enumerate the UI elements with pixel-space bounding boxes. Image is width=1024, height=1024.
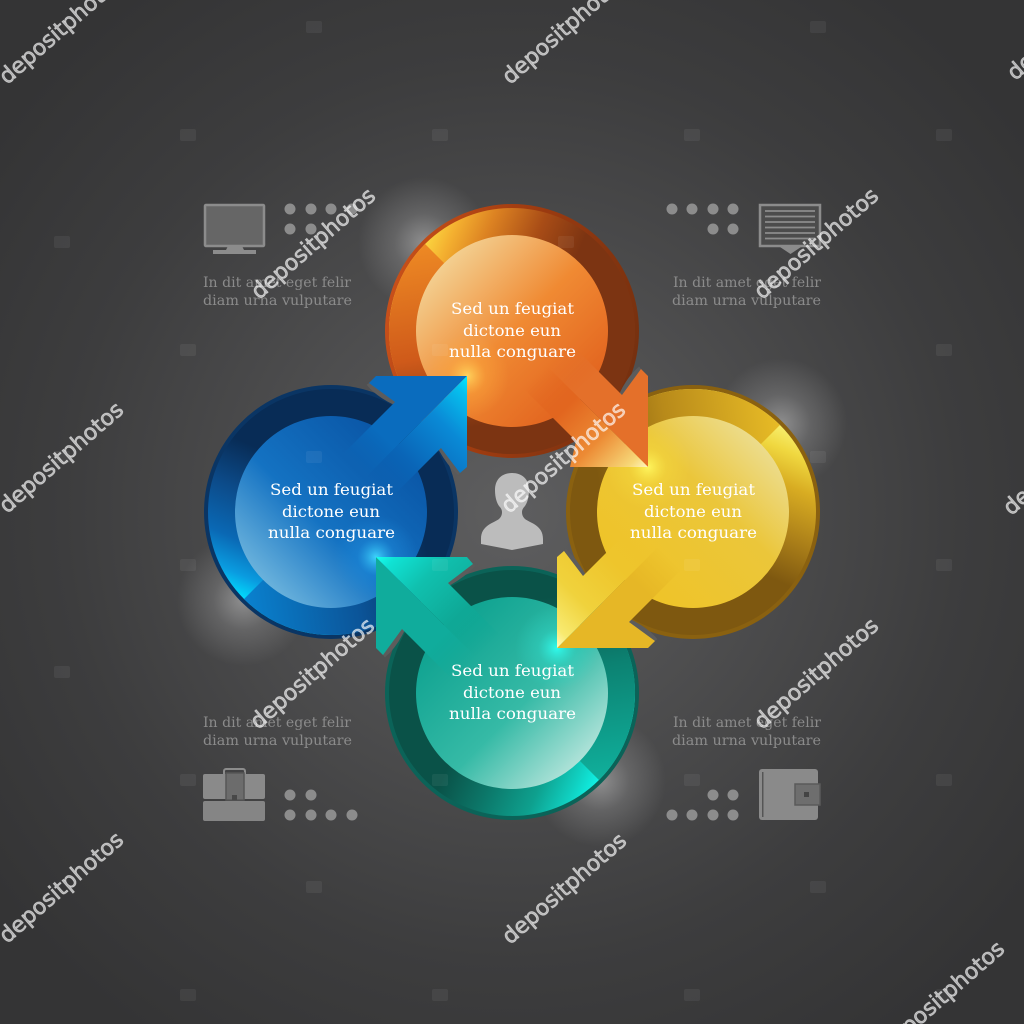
text: teal circle: dictone eun bbox=[463, 684, 561, 702]
watermarks: depositphotos bbox=[246, 613, 380, 735]
caption: top left: In dit amet eget felir bbox=[203, 275, 352, 291]
caption: top right: diam urna vulputare bbox=[672, 293, 821, 309]
text: blue circle: dictone eun bbox=[282, 503, 380, 521]
icon: wallet bbox=[759, 769, 820, 820]
dots: top right bbox=[666, 204, 738, 234]
watermarks: depositphotos bbox=[750, 183, 884, 305]
arrow: blue bbox=[331, 376, 467, 512]
icon: person bbox=[481, 473, 543, 550]
caption: bottom right: In dit amet eget felir bbox=[673, 715, 822, 731]
caption: top right: In dit amet eget felir bbox=[673, 275, 822, 291]
circle: blue bbox=[204, 385, 458, 639]
caption: bottom left: In dit amet eget felir bbox=[203, 715, 352, 731]
watermarks: depositphotos bbox=[498, 828, 632, 950]
watermarks: depositphotos bbox=[497, 397, 631, 519]
text: teal circle: Sed un feugiat bbox=[451, 662, 575, 680]
dots: bottom left bbox=[284, 790, 358, 820]
icon: document speech bubble bbox=[760, 205, 820, 254]
circle: teal bbox=[385, 566, 639, 820]
caption: top left: diam urna vulputare bbox=[203, 293, 352, 309]
text: blue circle: nulla conguare bbox=[268, 524, 395, 542]
text: orange circle: Sed un feugiat bbox=[451, 300, 575, 318]
arrow: gold bbox=[557, 512, 693, 648]
dots: top left bbox=[284, 204, 358, 234]
text: gold circle: nulla conguare bbox=[630, 524, 757, 542]
caption: bottom right: diam urna vulputare bbox=[672, 733, 821, 749]
circle: orange bbox=[385, 204, 639, 458]
halo glows bbox=[177, 177, 847, 847]
dots: bottom right bbox=[666, 790, 738, 820]
caption: bottom left: diam urna vulputare bbox=[203, 733, 352, 749]
text: gold circle: Sed un feugiat bbox=[632, 481, 756, 499]
arrow: teal bbox=[376, 557, 512, 693]
watermarks: depositphotos bbox=[750, 613, 884, 735]
text: teal circle: nulla conguare bbox=[449, 705, 576, 723]
text: orange circle: dictone eun bbox=[463, 322, 561, 340]
text: blue circle: Sed un feugiat bbox=[270, 481, 394, 499]
text: orange circle: nulla conguare bbox=[449, 343, 576, 361]
watermarks: depositphotos bbox=[247, 183, 381, 305]
text: gold circle: dictone eun bbox=[644, 503, 742, 521]
circle: gold bbox=[566, 385, 820, 639]
icon: briefcase bbox=[203, 769, 265, 821]
arrow: orange bbox=[512, 331, 648, 467]
icon: monitor bbox=[205, 205, 264, 254]
